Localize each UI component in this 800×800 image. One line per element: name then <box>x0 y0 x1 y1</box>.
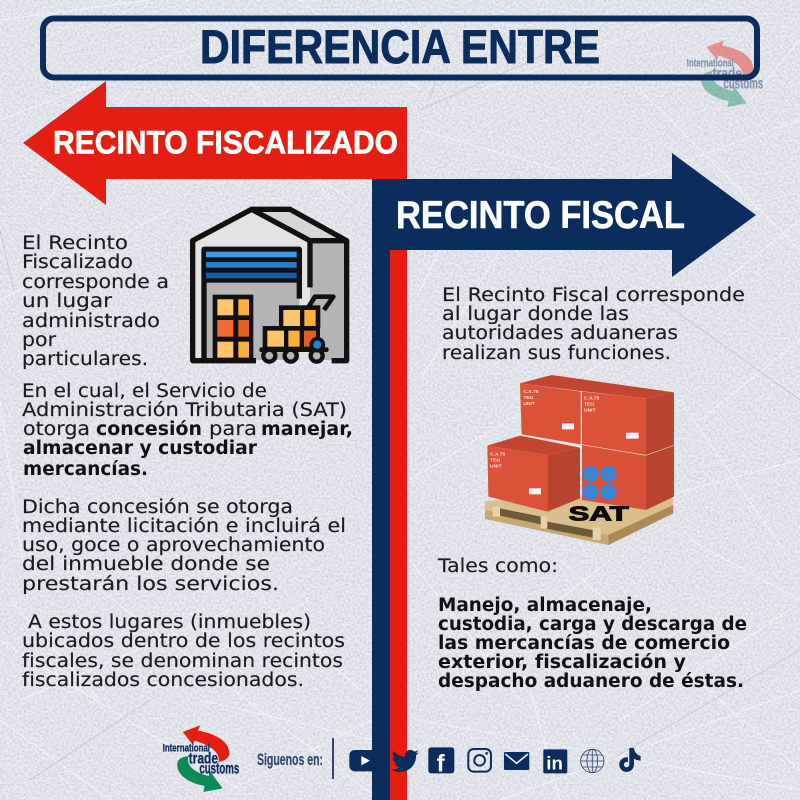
footer logo: trade <box>189 751 218 768</box>
title box <box>43 18 757 78</box>
title: DIFERENCIA ENTRE <box>200 20 600 73</box>
icon: instagram <box>468 749 491 772</box>
vertical red divider <box>390 250 407 800</box>
icon: warehouse <box>193 209 347 362</box>
image: pallet of boxes with SAT logo: TEU <box>490 458 500 464</box>
red arrow label: RECINTO FISCALIZADO <box>53 124 398 160</box>
text: recinto fiscal intro: autoridades aduaneras <box>442 323 678 344</box>
text: concesión SAT: concesión <box>96 419 202 440</box>
footer logo <box>163 725 239 792</box>
icon: facebook <box>428 747 454 777</box>
text: concesión SAT: para <box>209 419 257 440</box>
social icons <box>349 747 641 777</box>
text: licitación: Dicha concesión se otorga <box>22 497 293 518</box>
icon: youtube <box>349 750 377 771</box>
text: tales como: Tales como: <box>437 556 558 577</box>
text: recinto fiscal intro: realizan sus funciones. <box>442 343 671 364</box>
text: licitación: mediante licitación e incluirá el <box>22 516 346 537</box>
text: fiscalizado intro: administrado <box>22 311 160 332</box>
watermark logo: International <box>687 58 734 70</box>
text: concesión SAT: otorga <box>23 419 90 440</box>
image: pallet of boxes with SAT logo: C.X.75 <box>490 452 505 458</box>
footer logo: customs <box>199 761 239 778</box>
text: concesión SAT: manejar, <box>261 419 353 440</box>
text: recintos concesionados: ubicados dentro de los recintos <box>22 631 345 652</box>
text: fiscalizado intro: un lugar <box>22 291 112 312</box>
icon: facebook: f <box>437 750 446 777</box>
image: pallet of boxes with SAT logo <box>485 375 674 545</box>
text: fiscalizado intro <box>22 233 169 370</box>
image: pallet of boxes with SAT logo: TEU <box>523 395 534 401</box>
text: recintos concesionados: A estos lugares (inmuebles) <box>28 612 311 633</box>
watermark logo <box>687 40 763 107</box>
text: funciones aduaneras: Manejo, almacenaje, <box>438 595 652 616</box>
navy arrow label: RECINTO FISCAL <box>396 194 685 237</box>
icon: twitter <box>392 750 419 772</box>
text: recintos concesionados: fiscalizados concesionados. <box>22 670 304 691</box>
icon: SAT logo <box>569 466 629 526</box>
icon: tiktok <box>619 748 641 772</box>
text: licitación <box>22 497 346 595</box>
text: concesión SAT: almacenar y custodiar <box>23 438 258 459</box>
image: pallet of boxes with SAT logo: C.X.75 <box>584 396 599 402</box>
footer logo: International <box>163 743 210 755</box>
text: recinto fiscal intro: El Recinto Fiscal corresponde <box>442 285 745 306</box>
icon: linkedin <box>543 749 567 773</box>
text: licitación: prestarán los servicios. <box>22 574 279 595</box>
text: licitación: uso, goce o aprovechamiento <box>22 535 325 556</box>
text: funciones aduaneras: despacho aduanero de éstas. <box>438 671 744 692</box>
red arrow: recinto fiscalizado <box>23 81 407 205</box>
text: fiscalizado intro: El Recinto <box>22 233 128 254</box>
image: pallet of boxes with SAT logo: TEU <box>584 402 594 408</box>
icon: email <box>504 752 529 770</box>
image: pallet of boxes with SAT logo: UNIT <box>490 464 502 470</box>
watermark logo: trade <box>713 66 742 83</box>
text: fiscalizado intro: por <box>22 330 56 351</box>
text: fiscalizado intro: Fiscalizado <box>22 252 133 273</box>
text: recintos concesionados: fiscales, se denominan recintos <box>22 651 343 672</box>
text: funciones aduaneras: custodia, carga y descarga de <box>438 614 747 635</box>
watermark logo: customs <box>723 76 763 93</box>
icon: globe <box>581 749 604 773</box>
icon: SAT logo: SAT <box>569 503 629 526</box>
icon: linkedin: in <box>546 752 563 773</box>
social label: Siguenos en: <box>257 751 323 769</box>
text: fiscalizado intro: corresponde a <box>22 272 169 293</box>
text: recinto fiscal intro <box>442 285 745 364</box>
text: funciones aduaneras <box>438 595 747 692</box>
text: licitación: del inmueble donde se <box>22 554 270 575</box>
image: pallet of boxes with SAT logo: UNIT <box>584 408 596 414</box>
text: recintos concesionados <box>22 612 345 691</box>
image: pallet of boxes with SAT logo: C.X.75 <box>523 389 539 395</box>
text: concesión SAT: Administración Tributaria (SAT) <box>22 400 347 421</box>
text: fiscalizado intro: particulares. <box>22 349 148 370</box>
text: funciones aduaneras: las mercancías de comercio <box>438 633 730 654</box>
text: concesión SAT: mercancías. <box>23 459 148 480</box>
text: concesión SAT <box>22 381 353 480</box>
separator <box>332 738 334 779</box>
image: pallet of boxes with SAT logo: UNIT <box>523 401 535 407</box>
text: funciones aduaneras: exterior, fiscalización y <box>438 652 686 673</box>
text: recinto fiscal intro: al lugar donde las <box>442 304 629 325</box>
text: concesión SAT: En el cual, el Servicio de <box>22 381 267 402</box>
